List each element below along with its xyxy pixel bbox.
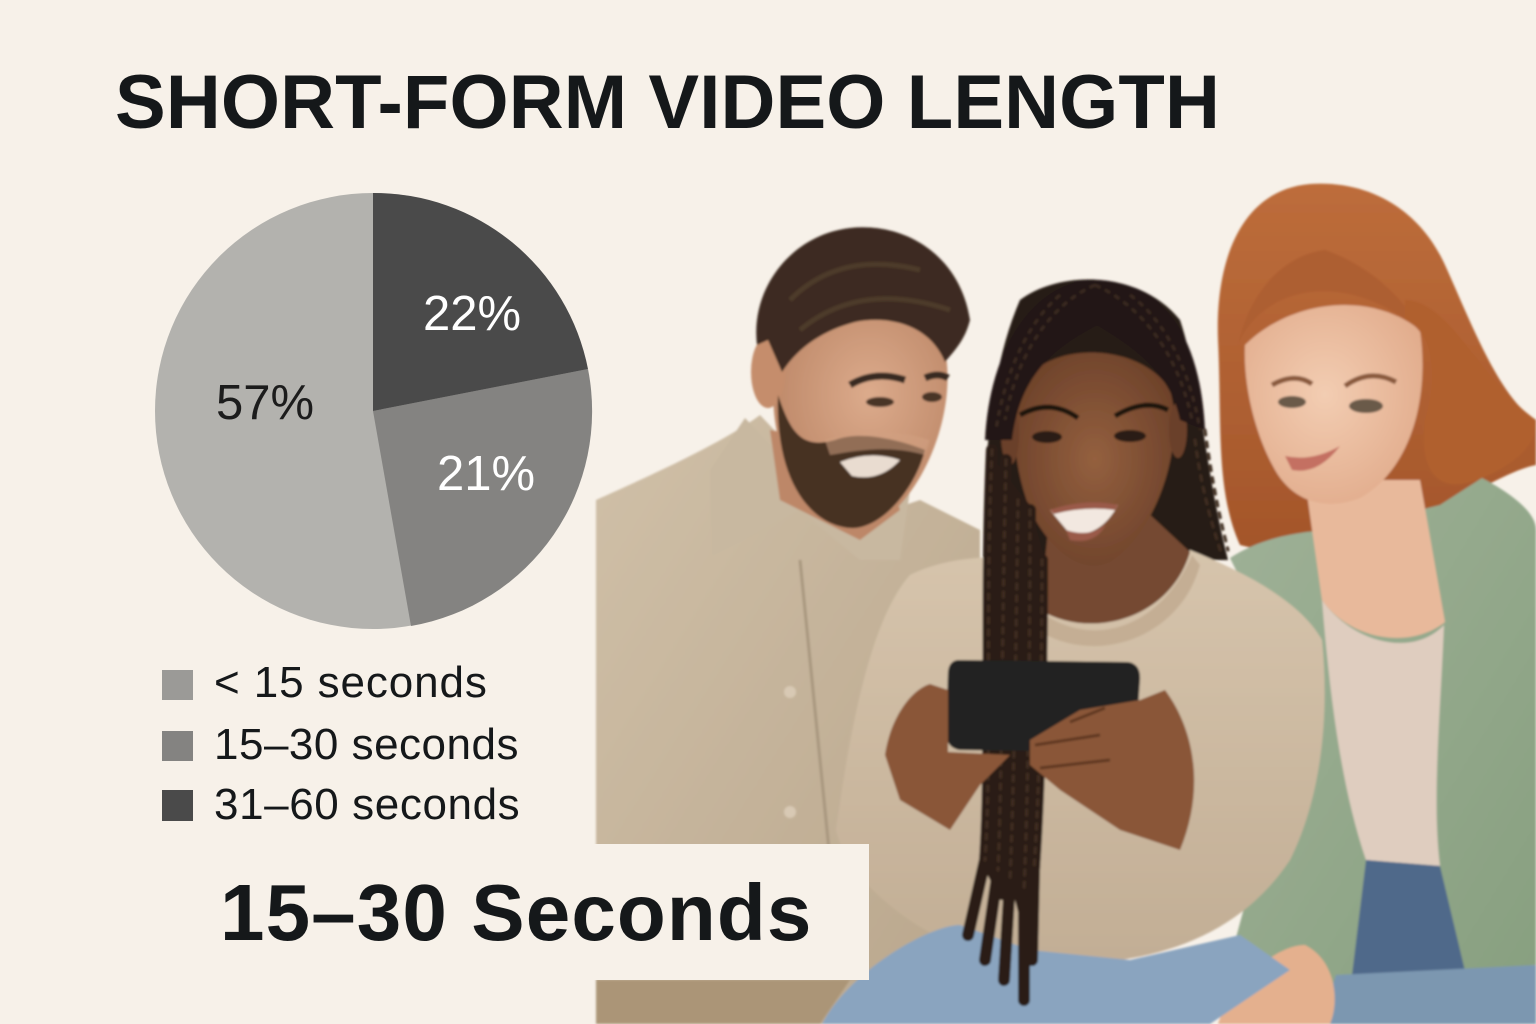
legend item: 31-60 seconds: 31–60 seconds: [214, 780, 520, 829]
man hair: [756, 227, 970, 372]
center woman neck: [1040, 510, 1190, 624]
center woman braided hair top: [985, 280, 1205, 440]
callout: 15-30 Seconds: 15–30 Seconds: [220, 868, 812, 957]
slice: 21% 15-30 seconds: [373, 369, 592, 626]
slice: 22% 31-60 seconds: [373, 193, 588, 411]
man neck: [770, 430, 900, 540]
center woman sweater: [836, 550, 1325, 960]
man lower body: [596, 980, 850, 1024]
man beard: [778, 395, 925, 528]
legend item: 15-30 seconds: 15–30 seconds: [214, 720, 519, 769]
slice: 21% 15-30 seconds: 21%: [437, 447, 535, 501]
right woman hair back: [1218, 184, 1536, 560]
center woman hands: [885, 684, 1010, 830]
right woman hand: [1218, 945, 1335, 1024]
phone: [946, 660, 1140, 752]
slice: 22% 31-60 seconds: 22%: [423, 287, 521, 341]
man face: [773, 311, 948, 520]
center woman jeans: [822, 925, 1290, 1024]
slice: 57% under 15 seconds: [155, 193, 591, 629]
center woman face: [1015, 352, 1174, 565]
right woman top: [1322, 600, 1444, 866]
right woman neck: [1305, 480, 1445, 638]
legend item: under 15 seconds: < 15 seconds: [214, 658, 488, 707]
man shirt: [596, 415, 980, 1024]
center woman front braids: [968, 430, 1228, 1000]
right woman face: [1245, 305, 1422, 504]
legend: [162, 658, 520, 829]
slice: 57% under 15 seconds: 57%: [216, 376, 314, 430]
center woman braids back: [985, 280, 1228, 700]
right woman cardigan: [1230, 478, 1536, 985]
callout: 15-30 Seconds: [161, 844, 869, 980]
title: SHORT-FORM VIDEO LENGTH: [115, 60, 1220, 145]
right woman jeans: [1352, 860, 1466, 975]
